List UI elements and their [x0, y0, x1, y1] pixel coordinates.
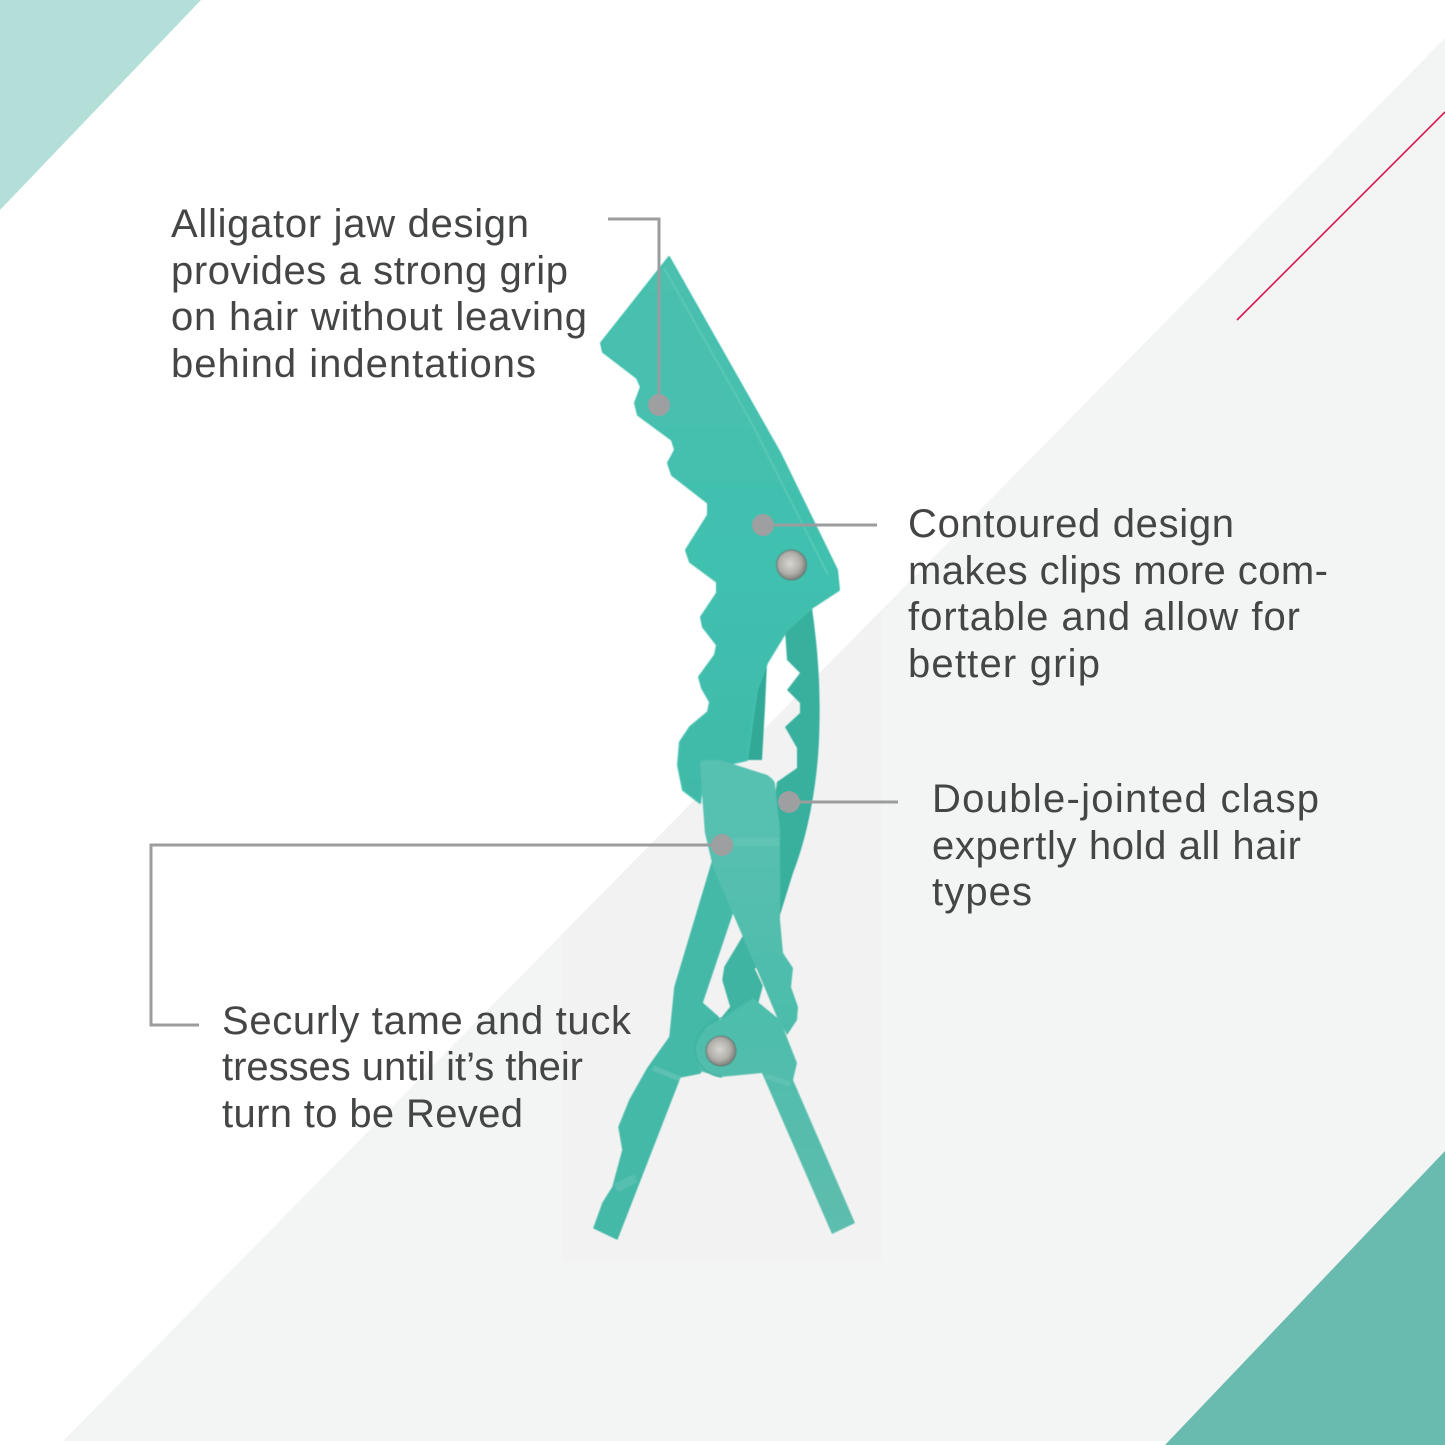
clip inner jaw shadow: [745, 663, 767, 760]
callout leader: alligator jaw: [608, 219, 670, 416]
clip left arm highlight: [653, 1068, 680, 1079]
clip slit: [756, 968, 779, 1017]
text: alligator jaw design: [171, 202, 587, 386]
text: double-jointed clasp: types: [932, 870, 1032, 914]
text: securely tame and tuck: turn to be Reved: [222, 1092, 523, 1136]
text: alligator jaw design: Alligator jaw design: [171, 202, 529, 246]
clip clasp top overlay: [700, 760, 779, 833]
text: contoured design: [908, 502, 1328, 686]
clip clasp lever: [700, 760, 798, 1035]
clip clasp highlight: [732, 838, 779, 846]
text: contoured design: better grip: [908, 642, 1100, 686]
text: double-jointed clasp: expertly hold all hair: [932, 824, 1301, 868]
text: securely tame and tuck: [222, 999, 632, 1136]
text: securely tame and tuck: tresses until it’s their: [222, 1045, 583, 1089]
corner triangle: bottom right teal: [1165, 1151, 1445, 1445]
clip jaw highlight ridge: [664, 268, 828, 575]
text: contoured design: Contoured design: [908, 502, 1234, 546]
rivet: lower: [706, 1036, 736, 1066]
product photo backdrop: [562, 610, 882, 1261]
corner triangle: top left mint: [0, 0, 201, 210]
clip lower right arm: [695, 998, 855, 1234]
text: contoured design: fortable and allow for: [908, 595, 1300, 639]
clip pivot ring: [695, 1018, 722, 1077]
callout leader: double-jointed clasp: [778, 791, 898, 813]
clip left tip highlight: [616, 1178, 636, 1188]
clip lower right connector: [722, 932, 765, 1018]
text: securely tame and tuck: Securly tame and tuck: [222, 999, 632, 1043]
clip right leg highlight: [765, 1076, 790, 1084]
accent: red diagonal line: [1237, 112, 1445, 320]
callout leader: contoured design: [752, 514, 877, 536]
text: alligator jaw design: on hair without leaving: [171, 295, 587, 339]
clip back arm with teeth: [765, 608, 820, 915]
text: double-jointed clasp: Double-jointed clasp: [932, 777, 1319, 821]
product: alligator hair clip: [594, 257, 855, 1239]
callout leader: securely tame: [151, 834, 733, 1025]
text: contoured design: makes clips more com-: [908, 549, 1328, 593]
text: alligator jaw design: provides a strong grip: [171, 249, 568, 293]
rivet: upper: [776, 550, 806, 580]
clip lower left arm: [594, 860, 735, 1239]
clip top jaw: [601, 257, 839, 803]
text: double-jointed clasp: [932, 777, 1319, 914]
text: alligator jaw design: behind indentations: [171, 342, 536, 386]
